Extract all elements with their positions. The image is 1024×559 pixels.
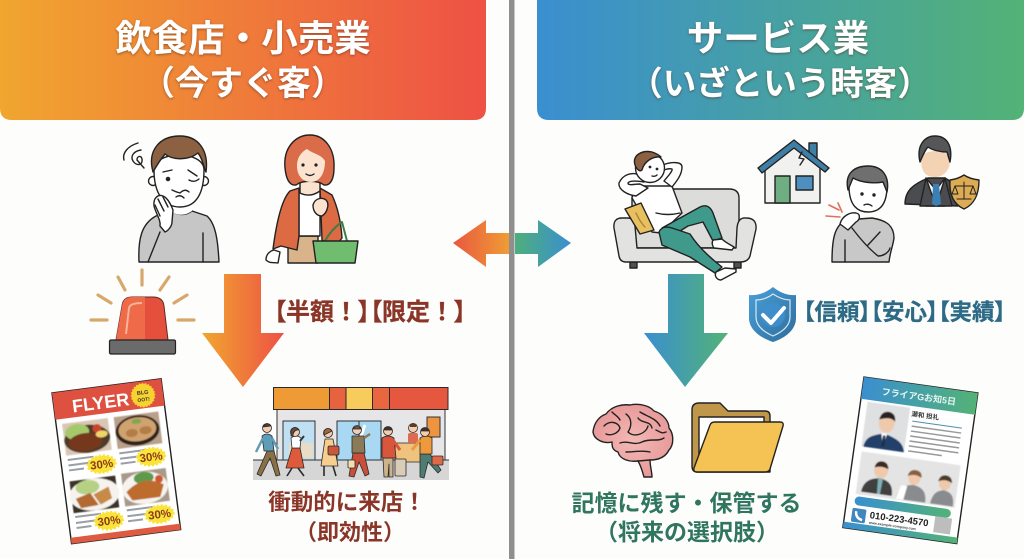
text: half price and limited: 【半額！】【限定！】 — [274, 299, 466, 326]
placeholder lines and discount bursts: 30% — [139, 450, 163, 465]
text: future option: （将来の選択肢） — [595, 519, 779, 545]
text: trust, safety, track record: 【信頼】【安心】【実績】 — [803, 300, 1006, 325]
icon: shield with check — [749, 287, 796, 342]
food photos — [60, 411, 170, 513]
customer 5 with suitcase — [382, 426, 406, 477]
icon: lawyer with badge — [905, 136, 979, 209]
icon: open folder — [692, 403, 783, 472]
placeholder lines and discount bursts: 30% — [97, 514, 121, 529]
icon: worry swirl — [124, 143, 144, 168]
feet — [712, 239, 734, 250]
phone number: 010-223-4570 — [869, 510, 929, 529]
placeholder lines and discount bursts: 30% — [90, 458, 114, 473]
icon: green basket — [313, 222, 358, 263]
text: immediate effect: （即効性） — [295, 520, 405, 545]
customer 4 — [348, 426, 370, 477]
badge — [130, 382, 156, 408]
arrow: center left-pointing — [453, 220, 509, 267]
flyer title: フライアGお知5日 — [881, 386, 957, 407]
phone icon — [851, 508, 867, 524]
contact banner — [854, 496, 951, 518]
flyer title: FLYER — [71, 389, 130, 416]
arms behind head — [619, 174, 648, 196]
arrow: center right-pointing — [515, 220, 571, 267]
clerk — [408, 423, 418, 443]
panel: right header — [537, 0, 1024, 120]
arrow: right vertical blue-green — [644, 274, 728, 387]
text: impulsive visit: 衝動的に来店！ — [268, 490, 426, 515]
customer 6 with bag — [412, 428, 443, 478]
web address: www.example-company.com — [868, 520, 916, 531]
profile lines — [908, 421, 962, 458]
heading: service industry: サービス業 — [687, 18, 869, 59]
staff photo — [856, 451, 961, 508]
subheading: when-needed customers: （いざという時客） — [629, 65, 931, 103]
flyer: restaurant discounts — [52, 379, 181, 544]
badge: scales — [950, 175, 979, 209]
icon: woman with shopping basket — [266, 135, 358, 263]
text: keep in memory and store: 記憶に残す・保管する — [572, 490, 802, 516]
shop sign — [274, 388, 448, 410]
torso — [632, 186, 682, 233]
customer 2 — [286, 428, 304, 476]
icon: red alarm light — [91, 270, 194, 354]
placeholder lines and discount bursts: 30% — [147, 508, 172, 523]
sofa — [614, 189, 756, 268]
placeholder lines and discount bursts — [68, 446, 174, 533]
qr code — [933, 516, 952, 534]
name: 瀬和 担礼 — [911, 409, 940, 422]
customer 1 — [256, 424, 280, 476]
badge: BLG — [137, 390, 149, 397]
legs — [662, 206, 722, 241]
icon: man relaxing on sofa — [614, 152, 756, 280]
portrait photo — [861, 402, 910, 452]
badge: OOT! — [137, 396, 151, 404]
center divider — [509, 0, 514, 559]
icon: worried man — [124, 136, 219, 262]
head — [636, 154, 664, 182]
pillow — [625, 203, 654, 234]
subheading: immediate customers: （今すぐ客） — [141, 65, 345, 103]
arrow: left vertical orange — [202, 274, 284, 387]
panel: left header — [0, 0, 486, 120]
flyer: service introduction — [843, 377, 978, 544]
icon: man with shoulder pain — [826, 166, 894, 262]
heading: restaurants and retail: 飲食店・小売業 — [115, 18, 371, 59]
customer 3 — [321, 428, 339, 476]
icon: brain — [593, 404, 673, 477]
icon: house with crack — [758, 140, 829, 203]
illustration: shop with customers — [253, 388, 449, 480]
